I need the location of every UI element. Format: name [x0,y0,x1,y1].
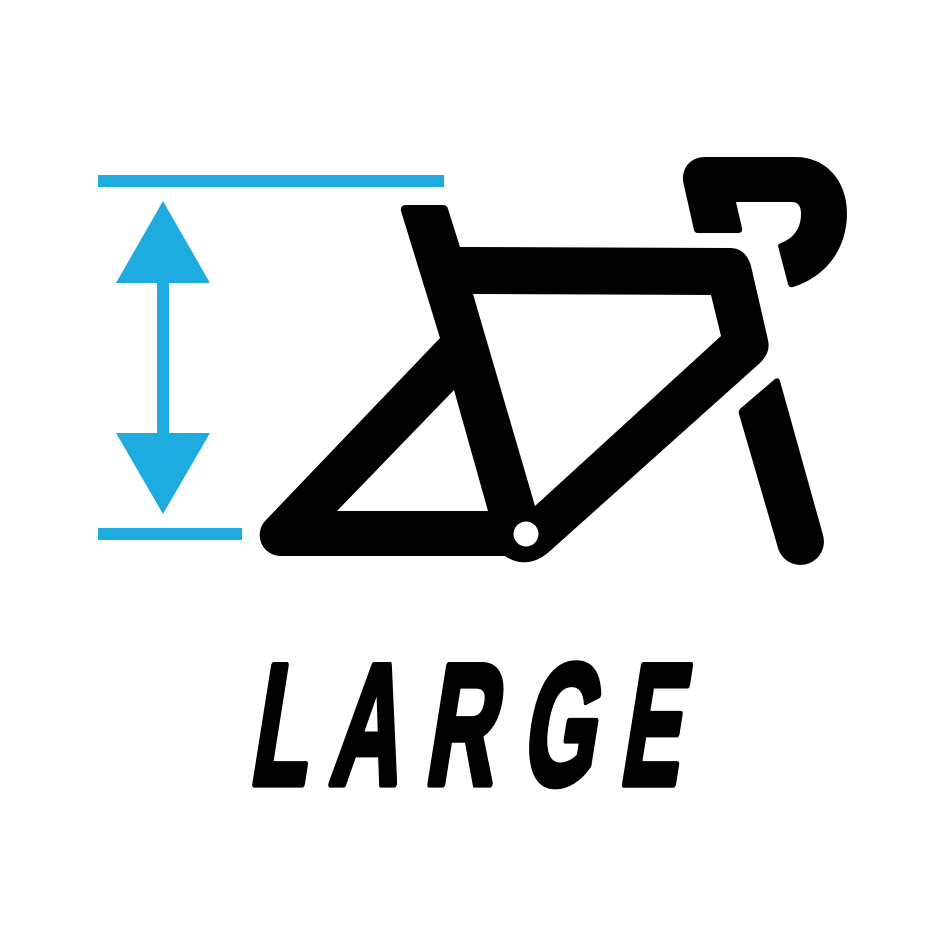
title: LARGE: R [417,629,517,821]
title: LARGE [242,628,702,821]
icon: handlebar [683,157,847,287]
icon: bike frame [260,205,769,562]
title: LARGE: L [242,628,330,821]
icon: double-headed height arrow [116,201,210,514]
top measurement line [98,175,444,187]
bottom bracket hole [514,522,538,546]
title: LARGE: E [612,630,702,821]
bottom measurement line [98,528,242,540]
title: LARGE: G [514,629,617,821]
title: LARGE: A [322,629,422,821]
icon: fork [739,378,824,565]
